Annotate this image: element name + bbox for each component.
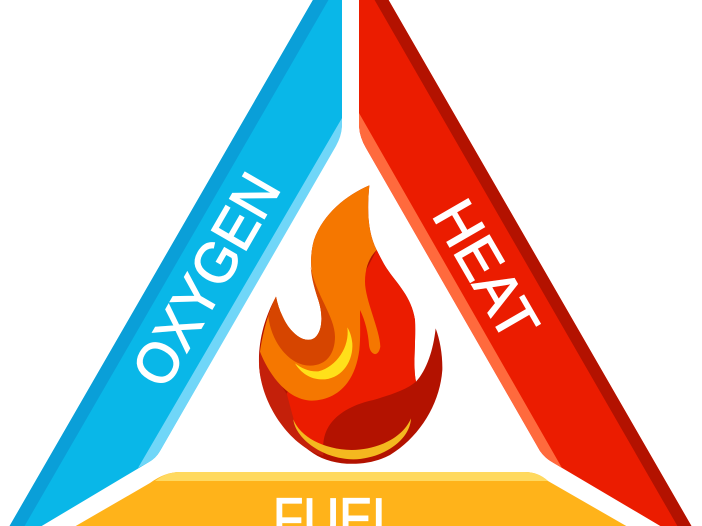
panel: fuel	[74, 472, 628, 526]
flame yellow crescent	[295, 327, 352, 379]
flame dark orange fold	[268, 267, 335, 366]
panel: oxygen	[9, 0, 342, 526]
label: heat: HEAT	[420, 189, 551, 351]
flame base	[259, 185, 442, 464]
icon: flame	[259, 185, 442, 464]
flame orange tongue	[260, 185, 380, 401]
panel: heat	[359, 0, 692, 526]
flame red body	[287, 250, 416, 447]
flame lower left shade	[259, 352, 323, 456]
label: oxygen: OXYGEN	[120, 162, 293, 398]
flame gold ring	[293, 418, 411, 459]
